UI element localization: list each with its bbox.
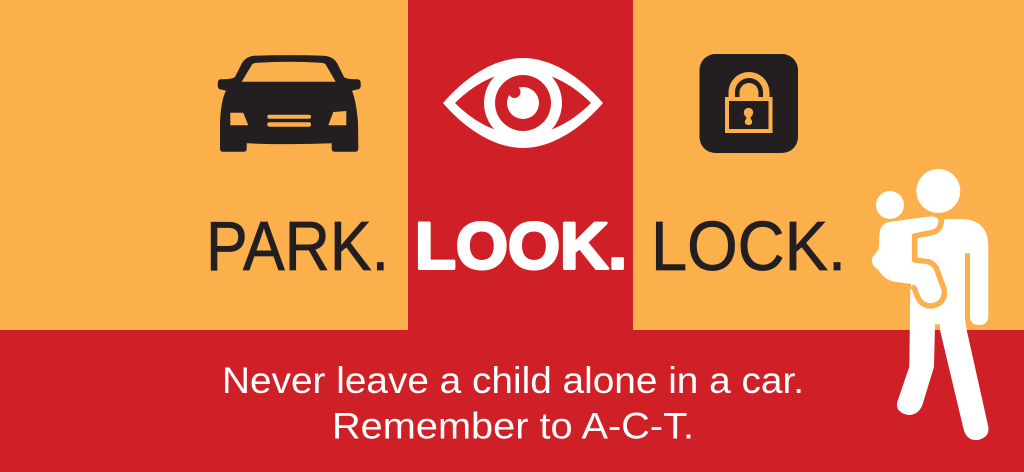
panel: centre red column	[408, 0, 633, 330]
icon: eye	[443, 58, 603, 148]
heading: PARK.: PARK.	[206, 207, 389, 285]
icon: padlock	[700, 54, 798, 153]
text: message line 2: Remember to A-C-T.	[332, 404, 694, 446]
child outline	[912, 216, 944, 306]
adult head	[916, 169, 960, 213]
heading: LOOK.: LOOK.	[415, 208, 627, 282]
silhouette: adult and child bodies	[872, 216, 989, 440]
text: message line 1: Never leave a child alone in a car.	[222, 359, 804, 401]
panel: orange background	[0, 0, 1024, 330]
icon: adult carrying child	[872, 169, 989, 440]
heading: LOCK.: LOCK.	[651, 207, 846, 285]
child head	[876, 191, 904, 219]
panel: bottom red band	[0, 330, 1024, 472]
icon: car	[218, 55, 361, 152]
